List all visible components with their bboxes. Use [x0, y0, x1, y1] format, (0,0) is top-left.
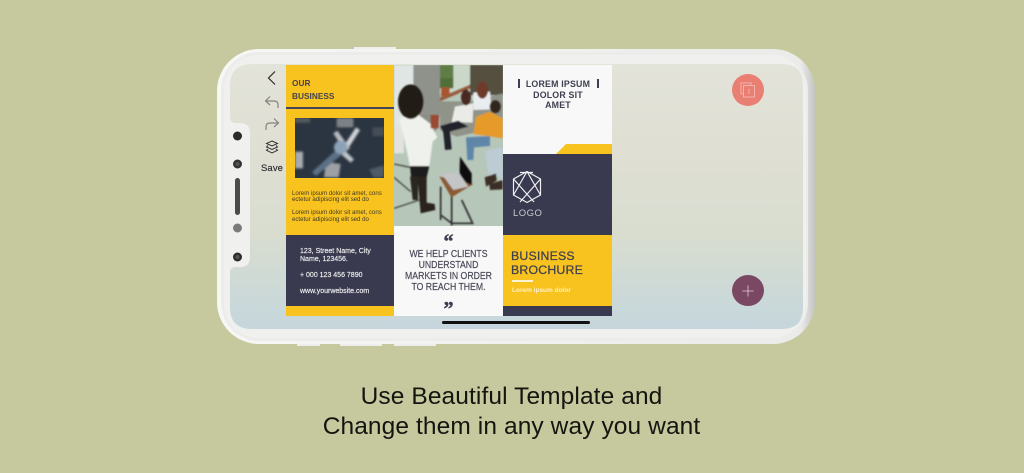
- presenter: [399, 113, 437, 167]
- caption: Use Beautiful Template and: [361, 383, 662, 410]
- heading: lorem ipsum: DOLOR SIT: [533, 90, 583, 100]
- text block: lorem 2: Lorem ipsum dolor sit amet, cons: [292, 209, 382, 216]
- sensor dots and speaker: [233, 132, 242, 262]
- screen: [230, 64, 803, 329]
- heading: business brochure: [511, 249, 583, 277]
- heading: business brochure: BUSINESS: [511, 249, 575, 263]
- text block: lorem 1: [292, 190, 382, 203]
- quote text: [405, 249, 492, 293]
- heading: our business: OUR: [292, 78, 310, 88]
- panel: logo: [503, 154, 612, 235]
- panel: our business: [286, 65, 394, 316]
- text block: lorem 2: ectetur adipiscing elit sed do: [292, 216, 369, 223]
- quote text: MARKETS IN ORDER: [405, 271, 492, 282]
- subtitle: Lorem ipsum dolor: [512, 287, 571, 294]
- caption: Change them in any way you want: [323, 413, 700, 440]
- heading: our business: BUSINESS: [292, 90, 334, 100]
- icon: pages: [740, 82, 755, 98]
- toolbar: [261, 71, 283, 174]
- text block: lorem 1: Lorem ipsum dolor sit amet, cons: [292, 190, 382, 197]
- home indicator: [442, 321, 590, 324]
- panel: business brochure: [503, 235, 612, 306]
- opening quote mark: “: [444, 231, 454, 253]
- icon: plus: [742, 286, 754, 296]
- address: 123, Street Name, City: [300, 248, 371, 254]
- icon: hexagon logo: [512, 170, 542, 204]
- table and laptop: [439, 177, 473, 197]
- quote text: TO REACH THEM.: [411, 282, 486, 293]
- photo: team hands: [295, 118, 384, 178]
- phone number: + 000 123 456 7890: [300, 272, 362, 279]
- panel: quote: [394, 226, 503, 316]
- quote text: WE HELP CLIENTS: [409, 249, 488, 260]
- panel: title cover: [503, 65, 612, 316]
- heading: lorem ipsum: [526, 79, 590, 110]
- text block: lorem 2: [292, 209, 382, 223]
- icon: undo: [264, 96, 279, 108]
- icon: back chevron: [268, 71, 276, 85]
- logo text: LOGO: [513, 208, 542, 219]
- save label: Save: [261, 163, 283, 174]
- icon: redo: [265, 118, 280, 130]
- photo: presenter: [394, 65, 503, 226]
- address: [300, 247, 371, 263]
- icon: layers: [266, 140, 278, 154]
- button: add: [732, 275, 764, 306]
- panel: contact: [286, 235, 394, 306]
- audience: [473, 92, 491, 110]
- caption: [323, 383, 700, 440]
- heading: lorem ipsum: AMET: [545, 100, 571, 110]
- text block: lorem 1: ectetur adipiscing elit sed do: [292, 196, 369, 203]
- website: www.yourwebsite.com: [300, 288, 369, 295]
- yellow accent: [556, 144, 612, 154]
- address: Name, 123456.: [300, 256, 348, 263]
- heading: business brochure: BROCHURE: [511, 263, 583, 277]
- button: page count: [732, 74, 764, 106]
- heading: our business: [292, 78, 334, 100]
- brochure: [286, 65, 612, 316]
- quote text: UNDERSTAND: [419, 260, 478, 271]
- heading: lorem ipsum: LOREM IPSUM: [526, 79, 590, 89]
